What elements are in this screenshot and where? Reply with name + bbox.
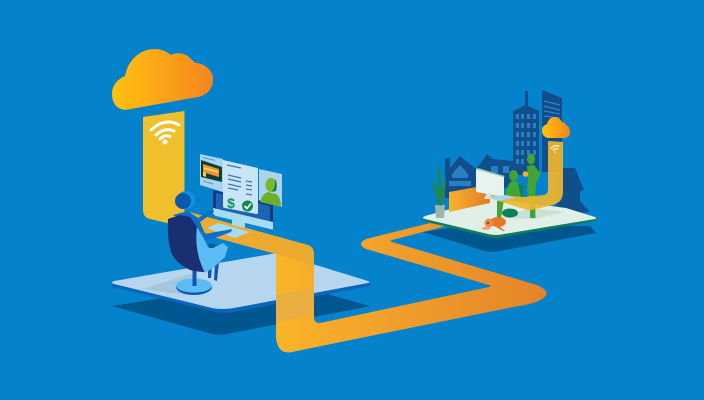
right platform shadow xyxy=(423,225,596,252)
monitor with floating screens xyxy=(200,154,282,230)
standing green person xyxy=(523,154,541,218)
small cloud xyxy=(542,117,570,138)
person seated on chair xyxy=(168,191,232,295)
plant in pot xyxy=(431,161,446,218)
card: chart xyxy=(200,154,223,192)
orange desk block xyxy=(449,187,490,212)
buildings and houses skyline xyxy=(445,90,590,214)
keyboard xyxy=(207,223,250,238)
glass tower xyxy=(542,90,562,172)
card: person xyxy=(259,169,282,207)
left platform shadow xyxy=(112,280,370,335)
dog xyxy=(481,217,506,231)
desk band xyxy=(186,211,314,266)
flowing path to remote office xyxy=(276,223,546,352)
chair back xyxy=(168,215,205,272)
legs xyxy=(208,265,212,278)
chair base xyxy=(176,279,212,295)
cloud large xyxy=(112,49,213,110)
seated green person xyxy=(497,170,524,218)
right house xyxy=(555,168,590,214)
monitor stand xyxy=(232,218,245,228)
right platform xyxy=(423,198,596,238)
chair seat xyxy=(196,227,228,273)
remote monitor xyxy=(476,168,515,201)
icon: check badge xyxy=(242,200,253,212)
head xyxy=(177,191,195,209)
icon: wifi small xyxy=(551,146,559,153)
chair shadow xyxy=(143,274,214,295)
small wifi column and desk xyxy=(489,141,563,210)
yellow wifi column xyxy=(143,111,210,232)
left platform xyxy=(112,253,370,313)
icon: wifi large xyxy=(151,122,179,144)
monitor body xyxy=(213,190,273,229)
left houses xyxy=(445,154,513,198)
icon: dollar: $ xyxy=(227,195,235,211)
apartment tower xyxy=(513,91,539,175)
torso and arm xyxy=(173,209,232,240)
